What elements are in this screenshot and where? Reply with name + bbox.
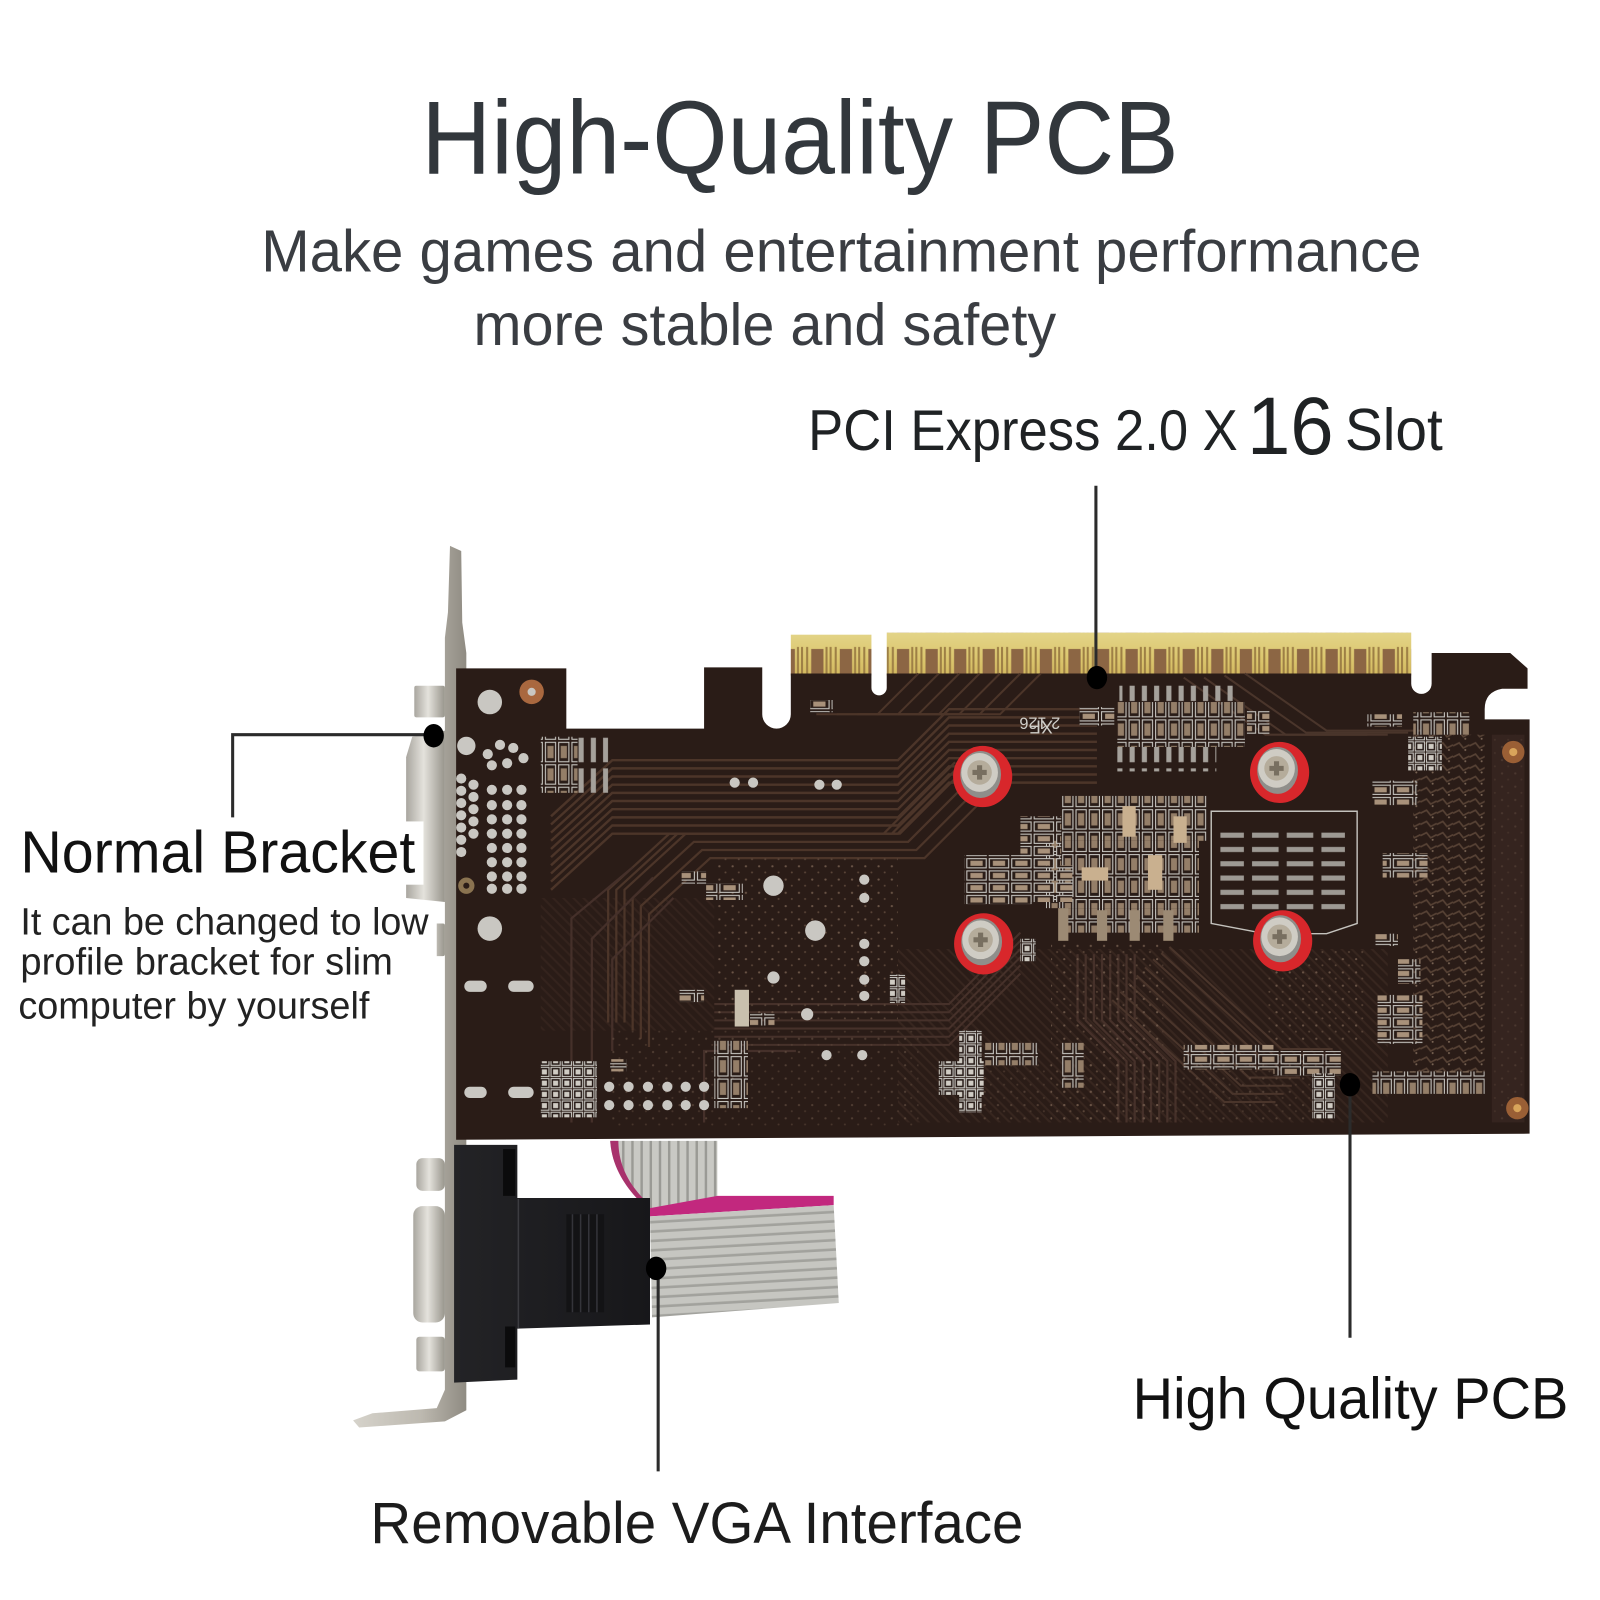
graphics card illustration (353, 546, 1530, 1428)
label: Normal Bracket: Normal Bracket (20, 818, 415, 885)
ribbon cable (610, 1141, 839, 1317)
PCB board (456, 653, 1530, 1140)
label: PCI Express slot: Slot (1345, 396, 1443, 463)
callout: PCI Express slot pointer (1087, 486, 1107, 689)
VGA connector front parts (413, 1158, 445, 1371)
gold PCI-E fingers (791, 633, 1411, 676)
label: Normal Bracket (18, 818, 429, 1026)
copper traces (541, 673, 1524, 1128)
title: High-Quality PCB (421, 80, 1179, 196)
DVI connector behind bracket (406, 686, 445, 956)
description: bracket note: profile bracket for slim (20, 940, 393, 982)
subtitle: Make games and entertainment performance (261, 217, 1421, 284)
subtitle: more stable and safety (473, 291, 1057, 358)
label: Removable VGA Interface: Removable VGA Interface (370, 1491, 1023, 1556)
callout: VGA interface pointer (646, 1257, 666, 1471)
metal bracket (353, 546, 466, 1428)
description: bracket note: computer by yourself (18, 984, 370, 1026)
label: PCI Express slot: PCI Express 2.0 X (808, 399, 1238, 463)
white backing behind bracket text (10, 821, 437, 1035)
label: High Quality PCB: High Quality PCB (1133, 1366, 1568, 1431)
solder pads and vias (456, 680, 1529, 1119)
label: PCI Express slot: 16 (1247, 381, 1334, 472)
label: PCI Express slot (808, 381, 1443, 472)
callout: High Quality PCB pointer (1340, 1073, 1360, 1338)
red mounting screws (953, 742, 1312, 974)
description: bracket note: It can be changed to low (20, 901, 429, 943)
silkscreen component clusters (541, 686, 1485, 1118)
black VGA adapter (454, 1145, 650, 1383)
callout: Normal Bracket pointer (233, 724, 444, 817)
silkscreen component clusters: 2 126 (1019, 713, 1060, 731)
description: bracket note (18, 901, 429, 1026)
silkscreen component clusters: XF (1030, 716, 1053, 737)
PCB details (456, 673, 1529, 1128)
subtitle (261, 217, 1421, 358)
